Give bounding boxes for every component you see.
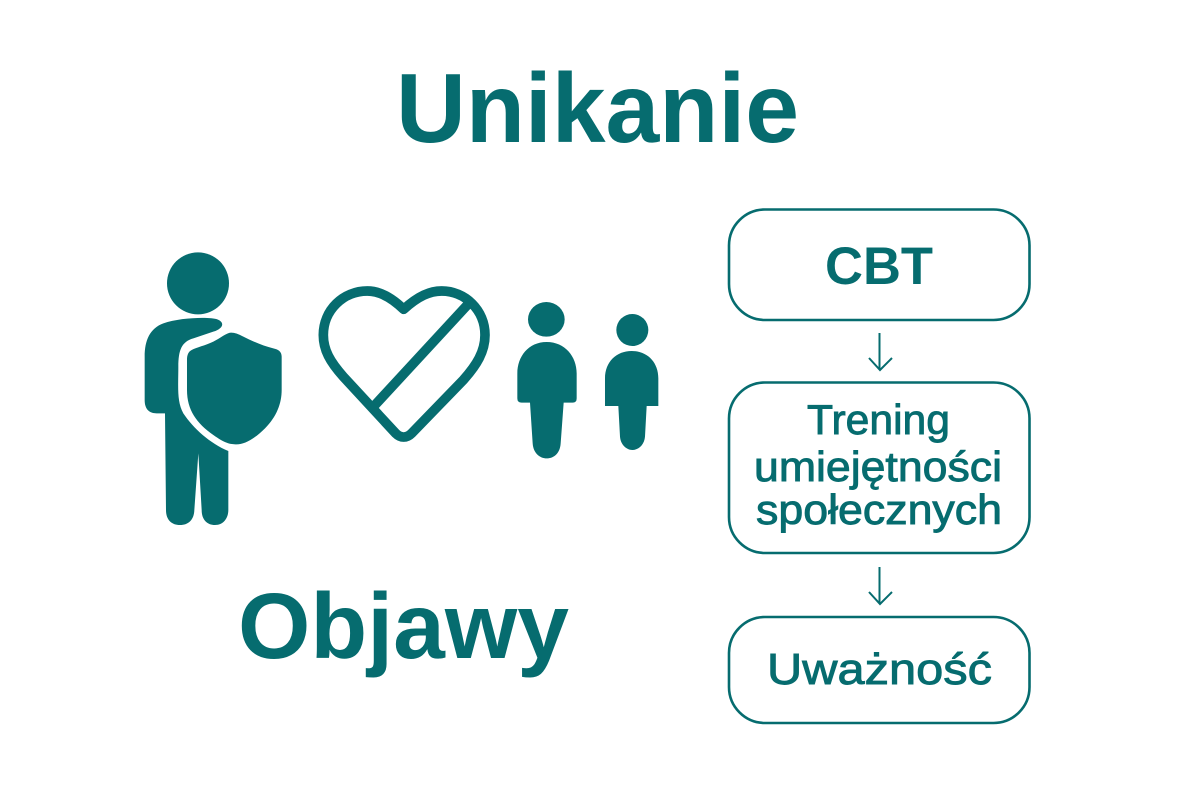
heading: symptoms: Objawy [238,574,569,678]
icon: crossed heart [323,291,485,437]
box: social skills training: Trening [807,396,950,443]
box: social skills training: umiejętności [754,443,1002,490]
box: CBT [729,210,1030,320]
box: mindfulness [729,617,1030,723]
box: social skills training [729,382,1030,553]
arrow: CBT to social skills [869,333,892,370]
title: Unikanie [396,53,799,163]
box: social skills training: społecznych [756,486,1002,533]
box: CBT: CBT [825,237,933,296]
arrow: social skills to mindfulness [869,567,892,604]
icon: person with shield [145,252,282,525]
box: mindfulness: Uważność [767,645,992,694]
icon: two people [517,302,658,458]
